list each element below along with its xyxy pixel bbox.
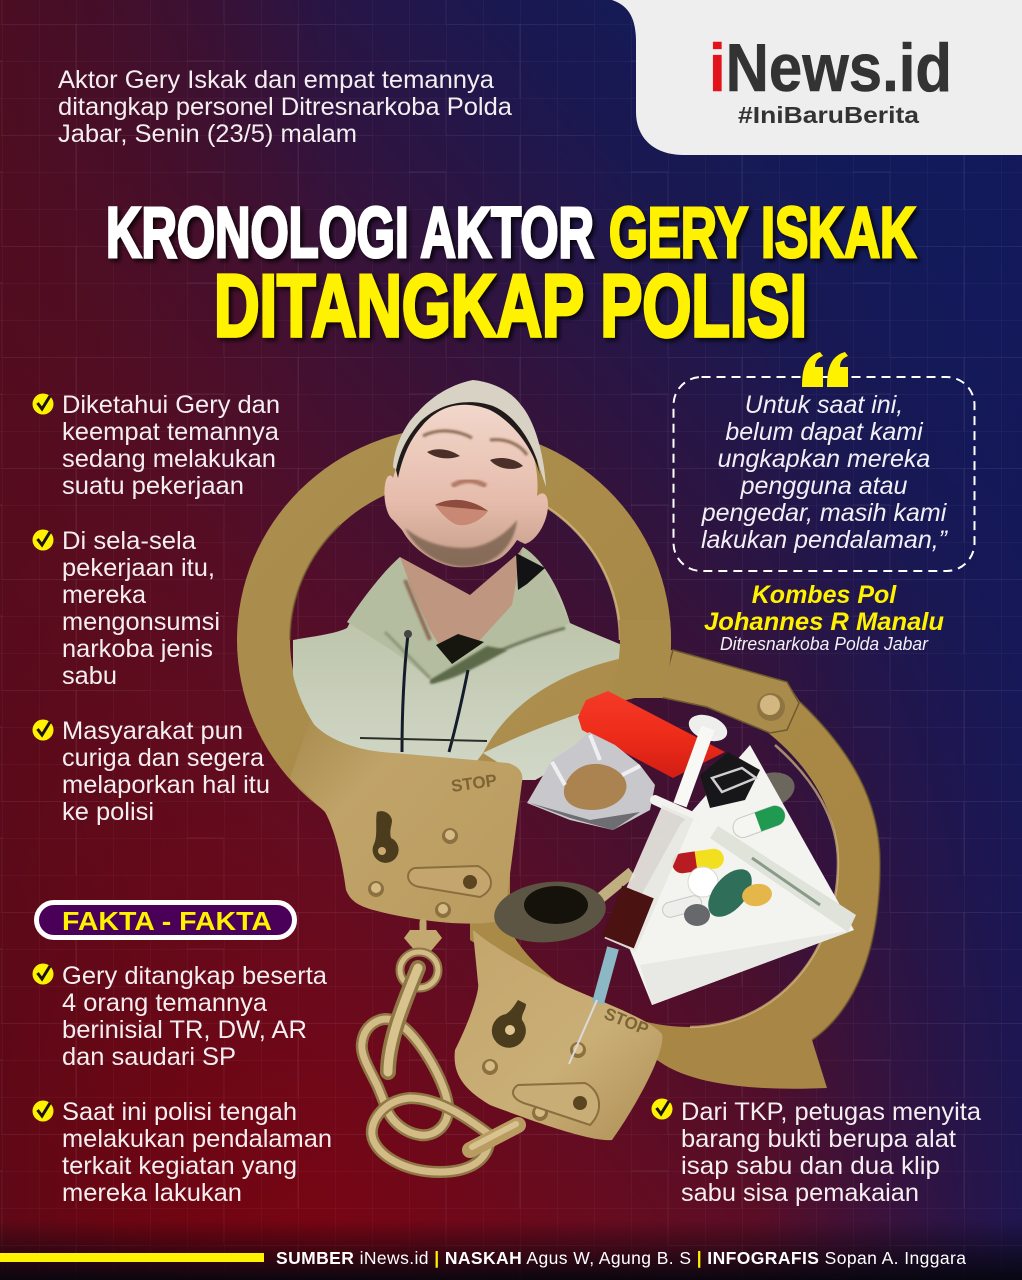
grey pill (684, 904, 710, 926)
logo: iNews.id: iNews.id (709, 30, 952, 106)
capsule green-white (730, 803, 788, 840)
person photo (293, 380, 622, 780)
fakta badge: FAKTA - FAKTA (62, 906, 272, 936)
mouth (435, 500, 488, 525)
lock plate upper (290, 720, 522, 924)
bullet list: kronologi: Diketahui Gery dan (62, 391, 280, 419)
drug paraphernalia (491, 691, 856, 1064)
bullet: barang bukti: sabu sisa pemakaian (681, 1179, 919, 1207)
drawstrings (402, 634, 468, 752)
bullet list: kronologi: sabu (62, 662, 117, 690)
quote box: Untuk saat ini, (745, 391, 903, 419)
powder packet (622, 745, 854, 1005)
key hole (373, 811, 399, 863)
icon: check (652, 1098, 672, 1120)
cuff ring lower (470, 650, 880, 1089)
icon: check (32, 720, 54, 740)
foil packet (527, 732, 655, 830)
brows and eyes (423, 431, 527, 455)
bullet list: fakta: terkait kegiatan yang (62, 1152, 297, 1180)
quote box: pengguna atau (740, 472, 908, 500)
bullet list: fakta: dan saudari SP (62, 1043, 236, 1071)
title: DITANGKAP POLISI (214, 256, 807, 355)
title (106, 194, 916, 355)
quote box: belum dapat kami (725, 418, 924, 446)
handcuffs (237, 380, 880, 1172)
bullet list: kronologi: suatu pekerjaan (62, 472, 244, 500)
bullet list: fakta: 4 orang temannya (62, 989, 267, 1017)
intro text: Aktor Gery Iskak dan empat temannya (58, 66, 494, 94)
quote box: ungkapkan mereka (718, 445, 930, 473)
icon: check (32, 394, 54, 414)
quote attribution (704, 581, 944, 654)
stamp: STOP (450, 771, 498, 796)
ring tip overlap (618, 620, 671, 698)
bullet list: kronologi: Masyarakat pun (62, 717, 243, 745)
chain (362, 922, 518, 1172)
quote attribution: Ditresnarkoba Polda Jabar (720, 634, 929, 654)
syringe (569, 710, 731, 1064)
logo panel (612, 0, 1022, 155)
icon: check (32, 964, 54, 984)
bullet list: fakta (32, 962, 332, 1207)
bullet list: kronologi: sedang melakukan (62, 445, 276, 473)
bullet list: fakta: Gery ditangkap beserta (62, 962, 327, 990)
cuff ring upper (237, 433, 671, 810)
icon: check (32, 530, 54, 550)
white capsule (661, 894, 703, 919)
tagline: #IniBaruBerita (738, 102, 919, 128)
bullet: barang bukti: Dari TKP, petugas menyita (681, 1098, 981, 1126)
bullet list: kronologi: narkoba jenis (62, 635, 213, 663)
lighter (578, 691, 725, 778)
bullet list: kronologi: melaporkan hal itu (62, 771, 270, 799)
quote box: lakukan pendalaman,” (701, 526, 949, 554)
bullet list: fakta: Saat ini polisi tengah (62, 1098, 297, 1126)
rolled bill (710, 826, 856, 932)
quote box (674, 352, 974, 571)
bullet list: kronologi: mereka (62, 581, 146, 609)
green pill (700, 861, 760, 925)
quote attribution: Kombes Pol (752, 581, 897, 609)
lock plate lower (455, 930, 662, 1140)
bullet: barang bukti: barang bukti berupa alat (681, 1125, 956, 1153)
intro text: Jabar, Senin (23/5) malam (58, 120, 357, 148)
bullet list: fakta: melakukan pendalaman (62, 1125, 332, 1153)
bullet: barang bukti (652, 1098, 981, 1207)
bullet list: kronologi: Di sela-sela (62, 527, 196, 555)
bullet list: kronologi: mengonsumsi (62, 608, 220, 636)
capsule red-yellow (671, 847, 725, 875)
icon: check (32, 1100, 54, 1122)
intro text (58, 66, 512, 148)
bullet list: fakta: berinisial TR, DW, AR (62, 1016, 307, 1044)
bullet list: kronologi: ke polisi (62, 798, 154, 826)
hinge bar (660, 650, 799, 733)
quote box: pengedar, masih kami (701, 499, 948, 527)
beanie (393, 380, 546, 487)
white tablet (688, 867, 718, 897)
handcuffs: STOP (602, 1004, 651, 1039)
yellow pill (740, 882, 774, 908)
fakta badge (36, 902, 294, 938)
rivet (757, 693, 785, 721)
head (384, 401, 548, 567)
icon: quote mark (802, 352, 848, 387)
title: KRONOLOGI AKTOR (106, 194, 594, 273)
bullet: barang bukti: isap sabu dan dua klip (681, 1152, 940, 1180)
footer bar (0, 1253, 264, 1262)
footer credits: SUMBER iNews.id | NASKAH Agus W, Agung B. S | INFOGRAFIS Sopan A. Inggara (276, 1248, 966, 1268)
bullet list: kronologi: pekerjaan itu, (62, 554, 215, 582)
black clip (700, 752, 760, 808)
bullet list: kronologi: curiga dan segera (62, 744, 264, 772)
bullet list: kronologi (32, 391, 280, 826)
bullet list: kronologi: keempat temannya (62, 418, 279, 446)
quote attribution: Johannes R Manalu (704, 608, 944, 636)
bullet list: fakta: mereka lakukan (62, 1179, 242, 1207)
spoon (592, 872, 632, 905)
hoodie (293, 547, 622, 780)
intro text: ditangkap personel Ditresnarkoba Polda (58, 93, 512, 121)
spoon back (700, 792, 772, 848)
